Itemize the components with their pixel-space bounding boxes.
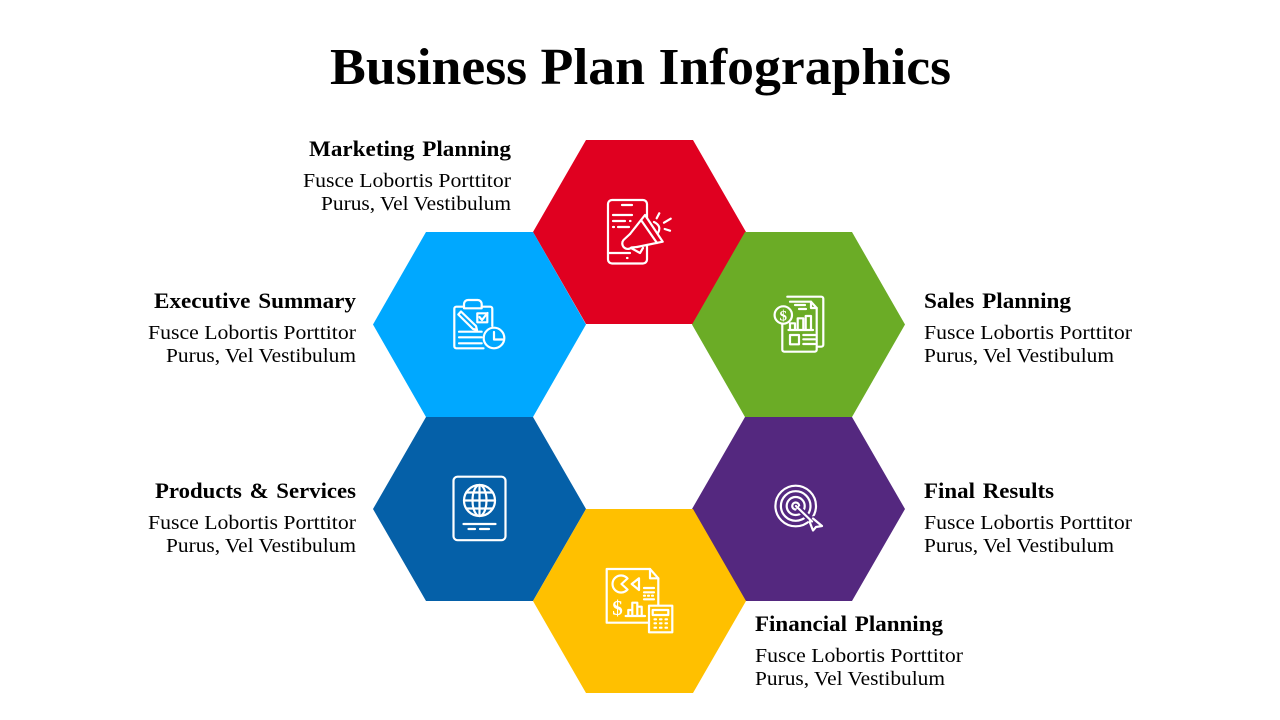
panel: financial planning	[533, 509, 963, 693]
description: marketing planning: Purus, Vel Vestibulum	[321, 193, 511, 215]
hexagon: sales planning	[692, 232, 905, 417]
description: financial planning: Purus, Vel Vestibulum	[755, 668, 945, 690]
icon: phone with megaphone	[608, 200, 671, 264]
description: final results: Purus, Vel Vestibulum	[924, 535, 1114, 557]
icon: passport globe	[454, 477, 506, 540]
hexagon: final results	[692, 417, 905, 601]
description: products and services: Fusce Lobortis Porttitor	[148, 512, 356, 534]
description: marketing planning: Fusce Lobortis Porttitor	[303, 170, 511, 192]
description: final results	[924, 512, 1132, 557]
heading: final results: Final Results	[924, 478, 1054, 503]
heading: products and services: Products & Services	[155, 478, 356, 503]
panel: final results	[692, 417, 1132, 601]
description: sales planning: Purus, Vel Vestibulum	[924, 345, 1114, 367]
panel: executive summary	[148, 232, 586, 417]
icon: sales report	[775, 297, 823, 352]
description: executive summary: Fusce Lobortis Porttitor	[148, 322, 356, 344]
description: financial planning	[755, 645, 963, 690]
description: executive summary: Purus, Vel Vestibulum	[166, 345, 356, 367]
hexagon: executive summary	[373, 232, 586, 417]
hexagon: products and services	[373, 417, 586, 601]
heading: marketing planning: Marketing Planning	[309, 136, 512, 161]
description: products and services	[148, 512, 356, 557]
heading: executive summary: Executive Summary	[154, 288, 357, 313]
icon: dollar sign: $	[612, 596, 623, 620]
panel: marketing planning	[303, 136, 746, 324]
hexagon: marketing planning	[533, 140, 746, 324]
heading: sales planning: Sales Planning	[924, 288, 1072, 313]
icon: target with arrow	[775, 486, 822, 531]
description: products and services: Purus, Vel Vestibulum	[166, 535, 356, 557]
description: marketing planning	[303, 170, 511, 215]
description: executive summary	[148, 322, 356, 367]
description: sales planning	[924, 322, 1132, 367]
icon: clipboard with clock	[454, 300, 504, 348]
description: final results: Fusce Lobortis Porttitor	[924, 512, 1132, 534]
title: Business Plan Infographics	[330, 39, 951, 96]
panel: sales planning	[692, 232, 1132, 417]
description: financial planning: Fusce Lobortis Porttitor	[755, 645, 963, 667]
heading: financial planning: Financial Planning	[755, 611, 944, 636]
hexagon: financial planning	[533, 509, 746, 693]
description: sales planning: Fusce Lobortis Porttitor	[924, 322, 1132, 344]
icon: financial report with calculator	[607, 569, 672, 632]
icon: dollar sign: $	[780, 308, 788, 324]
panel: products and services	[148, 417, 586, 601]
